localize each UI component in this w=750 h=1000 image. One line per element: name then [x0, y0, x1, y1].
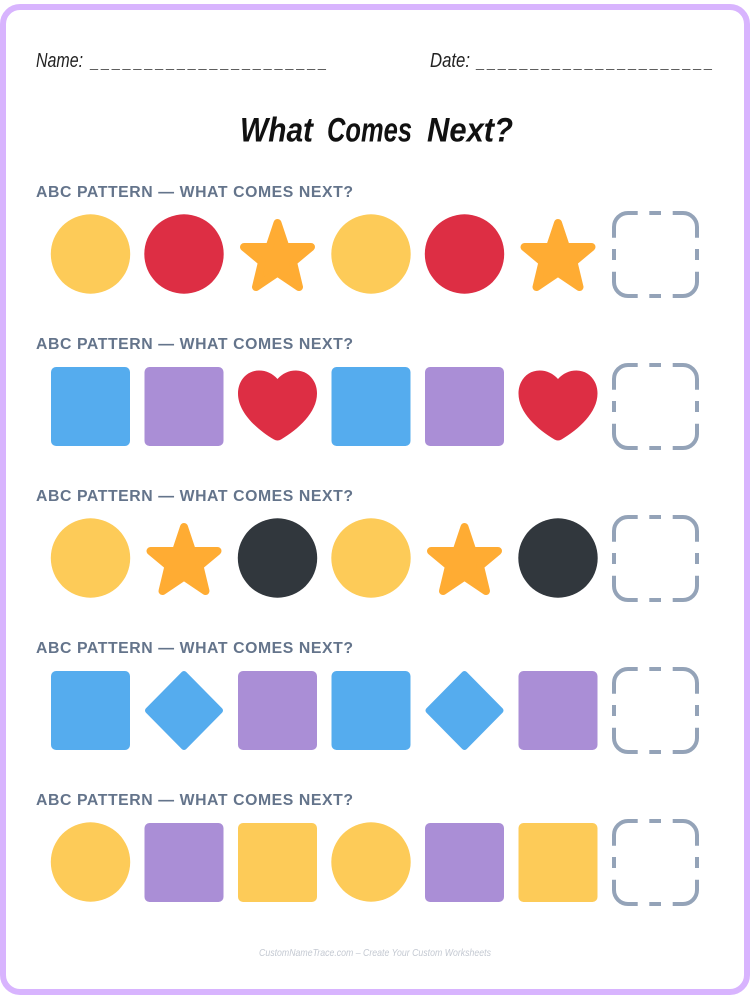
blue square — [51, 367, 130, 446]
row 3 pattern — [36, 488, 697, 600]
yellow circle — [51, 214, 130, 294]
empty answer box — [614, 213, 697, 296]
date field: Date: — [430, 50, 470, 72]
orange star — [244, 223, 311, 287]
purple square — [144, 823, 224, 902]
red heart — [238, 370, 317, 440]
red circle — [425, 214, 504, 294]
orange star — [524, 223, 592, 287]
title — [240, 112, 513, 150]
row 5 pattern — [36, 792, 697, 904]
yellow circle — [331, 214, 411, 294]
row 2 pattern — [36, 336, 697, 448]
title: Next? — [427, 112, 513, 150]
yellow circle — [51, 822, 130, 902]
blue diamond — [148, 674, 220, 747]
yellow square — [518, 823, 598, 902]
date field — [430, 50, 715, 72]
title: Comes — [327, 112, 412, 150]
purple square — [425, 367, 504, 446]
name field: ______________________ — [89, 55, 329, 71]
purple square — [238, 671, 317, 750]
blue square — [51, 671, 130, 750]
black circle — [518, 518, 598, 598]
blue square — [332, 671, 410, 750]
orange star — [431, 527, 498, 591]
row 2 label: ABC PATTERN — WHAT COMES NEXT? — [36, 336, 353, 353]
empty answer box — [614, 669, 697, 752]
red circle — [144, 214, 224, 294]
red heart — [518, 370, 598, 440]
purple square — [518, 671, 598, 750]
footer credit: CustomNameTrace.com – Create Your Custom Worksheets — [259, 947, 492, 959]
empty answer box — [614, 821, 697, 904]
name field: Name: — [36, 50, 83, 72]
black circle — [238, 518, 317, 598]
purple square — [144, 367, 224, 446]
date field: ______________________ — [475, 55, 715, 71]
purple square — [425, 823, 504, 902]
empty answer box — [614, 365, 697, 448]
yellow square — [238, 823, 317, 902]
row 5 label: ABC PATTERN — WHAT COMES NEXT? — [36, 792, 353, 809]
orange star — [150, 527, 218, 591]
yellow circle — [51, 518, 130, 598]
row 4 label: ABC PATTERN — WHAT COMES NEXT? — [36, 640, 353, 657]
title: What — [240, 112, 314, 150]
blue diamond — [428, 674, 500, 747]
yellow circle — [331, 822, 411, 902]
row 3 label: ABC PATTERN — WHAT COMES NEXT? — [36, 488, 353, 505]
empty answer box — [614, 517, 697, 600]
blue square — [332, 367, 410, 446]
yellow circle — [331, 518, 411, 598]
name field — [36, 50, 329, 72]
row 4 pattern — [36, 640, 697, 752]
row 1 label: ABC PATTERN — WHAT COMES NEXT? — [36, 184, 353, 201]
row 1 pattern — [36, 184, 697, 296]
